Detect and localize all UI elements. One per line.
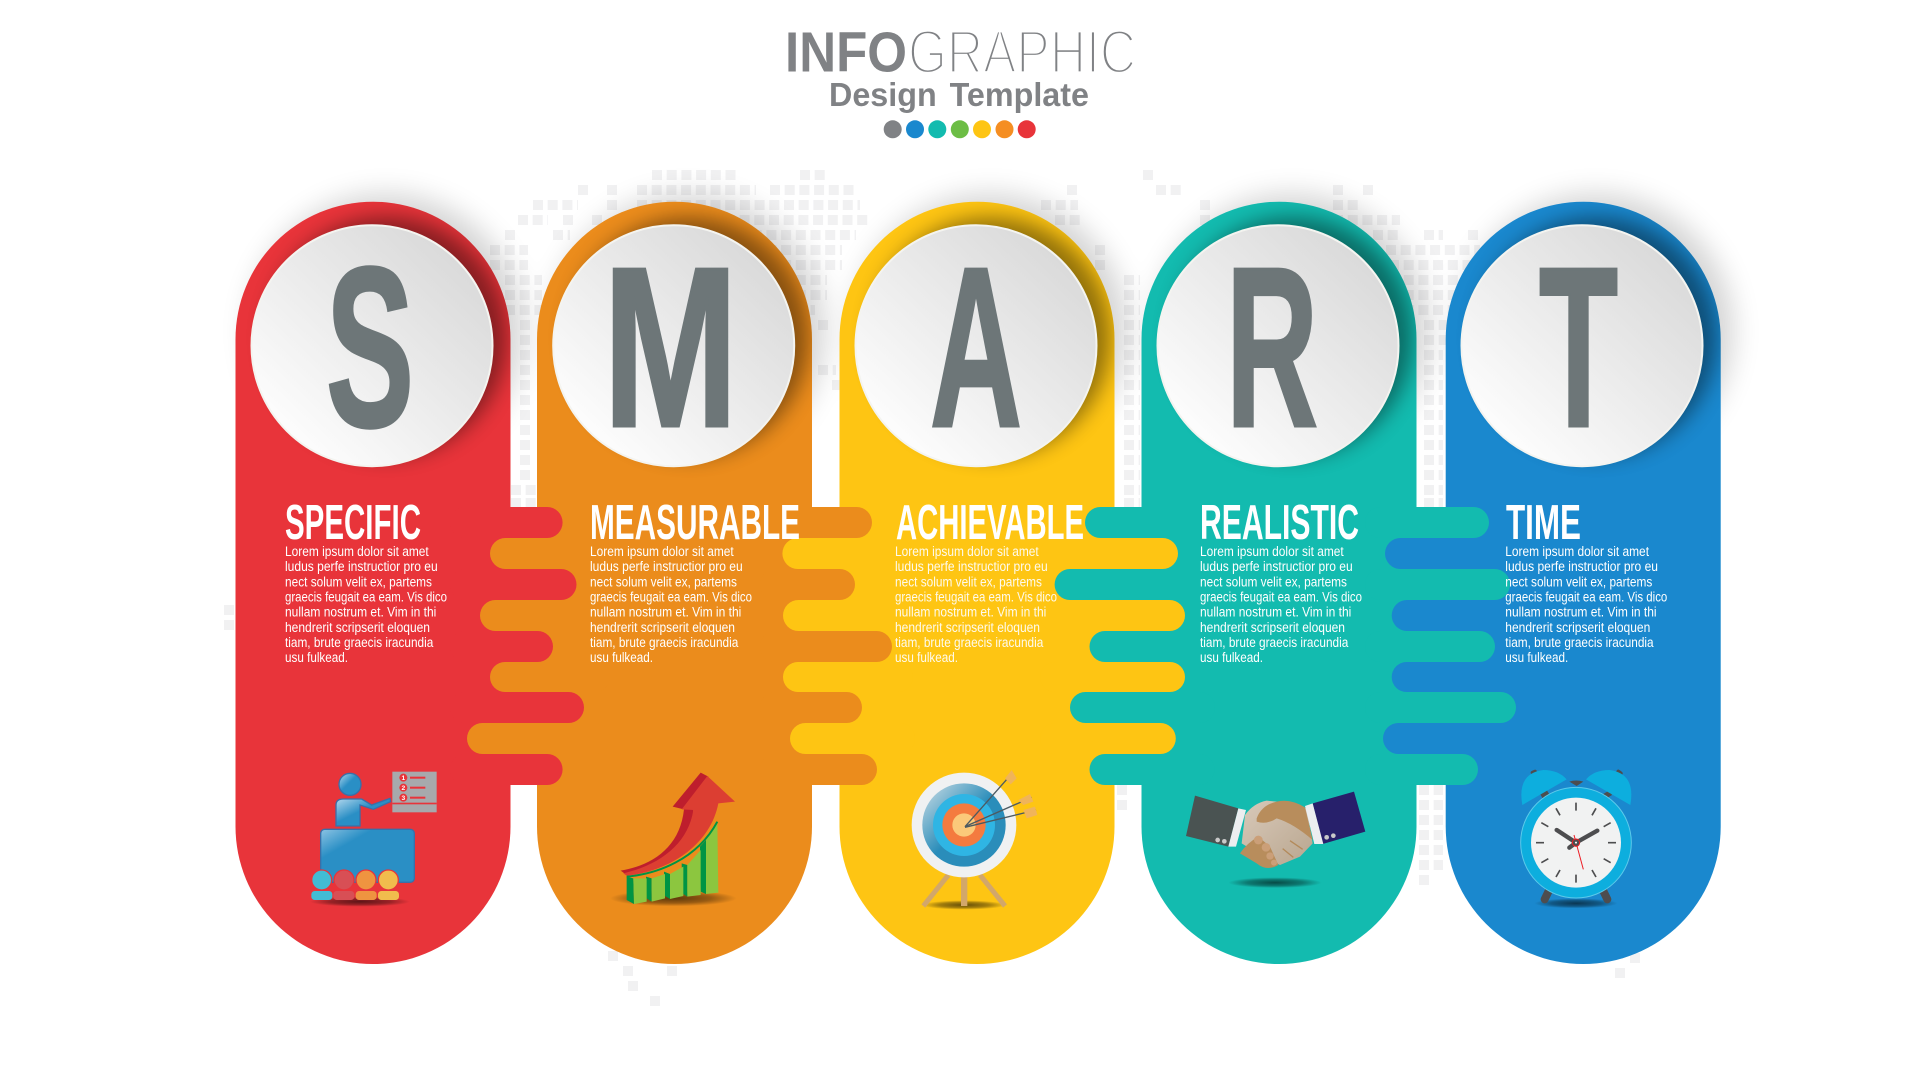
- description: hendrerit scripserit eloquen: [1505, 620, 1650, 635]
- letter A: A: [930, 221, 1022, 475]
- description: ludus perfe instructior pro eu: [1200, 559, 1353, 574]
- description: nullam nostrum et. Vim in thi: [1505, 605, 1657, 620]
- content: specific: [252, 217, 507, 907]
- letter R: R: [1226, 221, 1318, 475]
- content: achievable: [856, 217, 1111, 910]
- description: ludus perfe instructior pro eu: [895, 559, 1048, 574]
- icon: presenter with audience: [310, 772, 437, 907]
- heading: ACHIEVABLE: [896, 496, 1084, 550]
- icon: alarm clock: [1521, 770, 1631, 908]
- heading: TIME: [1506, 496, 1581, 550]
- description: nullam nostrum et. Vim in thi: [285, 605, 436, 620]
- description: tiam, brute graecis iracundia: [285, 635, 434, 650]
- description: graecis feugait ea eam. Vis dico: [1200, 590, 1362, 604]
- description: usu fulkead.: [590, 650, 653, 665]
- description: nect solum velit ex, partems: [285, 574, 432, 589]
- interlocking fingers: red and orange: [450, 507, 610, 785]
- description: usu fulkead.: [1200, 650, 1263, 665]
- description: Lorem ipsum dolor sit amet: [1200, 544, 1344, 559]
- description: graecis feugait ea eam. Vis dico: [895, 590, 1057, 604]
- description: usu fulkead.: [895, 650, 958, 665]
- description: nect solum velit ex, partems: [895, 574, 1042, 589]
- panel: achievable: [840, 202, 1114, 964]
- content: measurable: [553, 217, 809, 906]
- icon: handshake: [1186, 792, 1365, 888]
- description: graecis feugait ea eam. Vis dico: [1505, 590, 1667, 604]
- subtitle: Design Template: [829, 76, 1089, 113]
- description: Lorem ipsum dolor sit amet: [1505, 544, 1649, 559]
- heading: SPECIFIC: [285, 496, 421, 550]
- title: [785, 18, 1136, 138]
- icon: presenter with audience: 2: [401, 785, 405, 792]
- content: realistic: [1158, 217, 1413, 888]
- description: hendrerit scripserit eloquen: [1200, 620, 1345, 635]
- letter T: T: [1539, 221, 1618, 475]
- description: tiam, brute graecis iracundia: [1200, 635, 1349, 650]
- letter disc: [1158, 225, 1398, 466]
- description: ludus perfe instructior pro eu: [590, 559, 743, 574]
- description: nullam nostrum et. Vim in thi: [590, 605, 741, 620]
- description: tiam, brute graecis iracundia: [895, 635, 1044, 650]
- disc shadow: [569, 217, 809, 457]
- panel bodies: [236, 202, 1721, 964]
- description: graecis feugait ea eam. Vis dico: [285, 590, 447, 604]
- description: nullam nostrum et. Vim in thi: [1200, 605, 1351, 620]
- interlocking fingers: teal and blue: [1365, 507, 1533, 785]
- description: nect solum velit ex, partems: [590, 574, 737, 589]
- description: [590, 544, 752, 665]
- disc shadow: [871, 217, 1111, 457]
- description: tiam, brute graecis iracundia: [1505, 635, 1654, 650]
- letter S: S: [326, 221, 414, 475]
- description: Lorem ipsum dolor sit amet: [895, 544, 1039, 559]
- letter M: M: [603, 221, 738, 475]
- description: nullam nostrum et. Vim in thi: [895, 605, 1046, 620]
- title: INFO: INFO: [785, 21, 907, 85]
- letter disc: [1462, 225, 1702, 466]
- colour dots: [884, 120, 1036, 138]
- description: hendrerit scripserit eloquen: [590, 620, 735, 635]
- description: [895, 544, 1057, 665]
- disc shadow: [1477, 217, 1717, 457]
- description: Lorem ipsum dolor sit amet: [590, 544, 734, 559]
- description: [1200, 544, 1362, 665]
- description: hendrerit scripserit eloquen: [895, 620, 1040, 635]
- panel: measurable: [537, 202, 812, 964]
- interlocking fingers: orange and yellow: [760, 507, 915, 785]
- letter disc: [252, 225, 492, 466]
- interlocking fingers: yellow and teal: [1040, 507, 1215, 785]
- description: Lorem ipsum dolor sit amet: [285, 544, 429, 559]
- description: [1505, 544, 1667, 665]
- description: tiam, brute graecis iracundia: [590, 635, 739, 650]
- panel: realistic: [1142, 202, 1416, 964]
- panel: specific: [236, 202, 510, 964]
- description: [285, 544, 447, 665]
- description: ludus perfe instructior pro eu: [1505, 559, 1658, 574]
- description: usu fulkead.: [1505, 650, 1568, 665]
- letter disc: [856, 225, 1096, 466]
- letter disc: [553, 225, 794, 466]
- heading: REALISTIC: [1200, 496, 1359, 550]
- description: nect solum velit ex, partems: [1200, 574, 1347, 589]
- description: nect solum velit ex, partems: [1505, 574, 1653, 589]
- icon: growth chart with arrow: [610, 773, 737, 906]
- disc shadow: [267, 217, 507, 457]
- icon: target with arrows: [912, 770, 1037, 910]
- icon: presenter with audience: 3: [401, 795, 405, 802]
- icon: presenter with audience: 1: [401, 775, 405, 782]
- description: hendrerit scripserit eloquen: [285, 620, 430, 635]
- heading: MEASURABLE: [590, 496, 800, 550]
- title: GRAPHIC: GRAPHIC: [908, 18, 1136, 86]
- panel: time: [1446, 202, 1721, 964]
- description: ludus perfe instructior pro eu: [285, 559, 438, 574]
- content: time: [1462, 217, 1717, 908]
- column cast shadows: [249, 194, 1733, 468]
- disc shadow: [1173, 217, 1413, 457]
- description: graecis feugait ea eam. Vis dico: [590, 590, 752, 604]
- description: usu fulkead.: [285, 650, 348, 665]
